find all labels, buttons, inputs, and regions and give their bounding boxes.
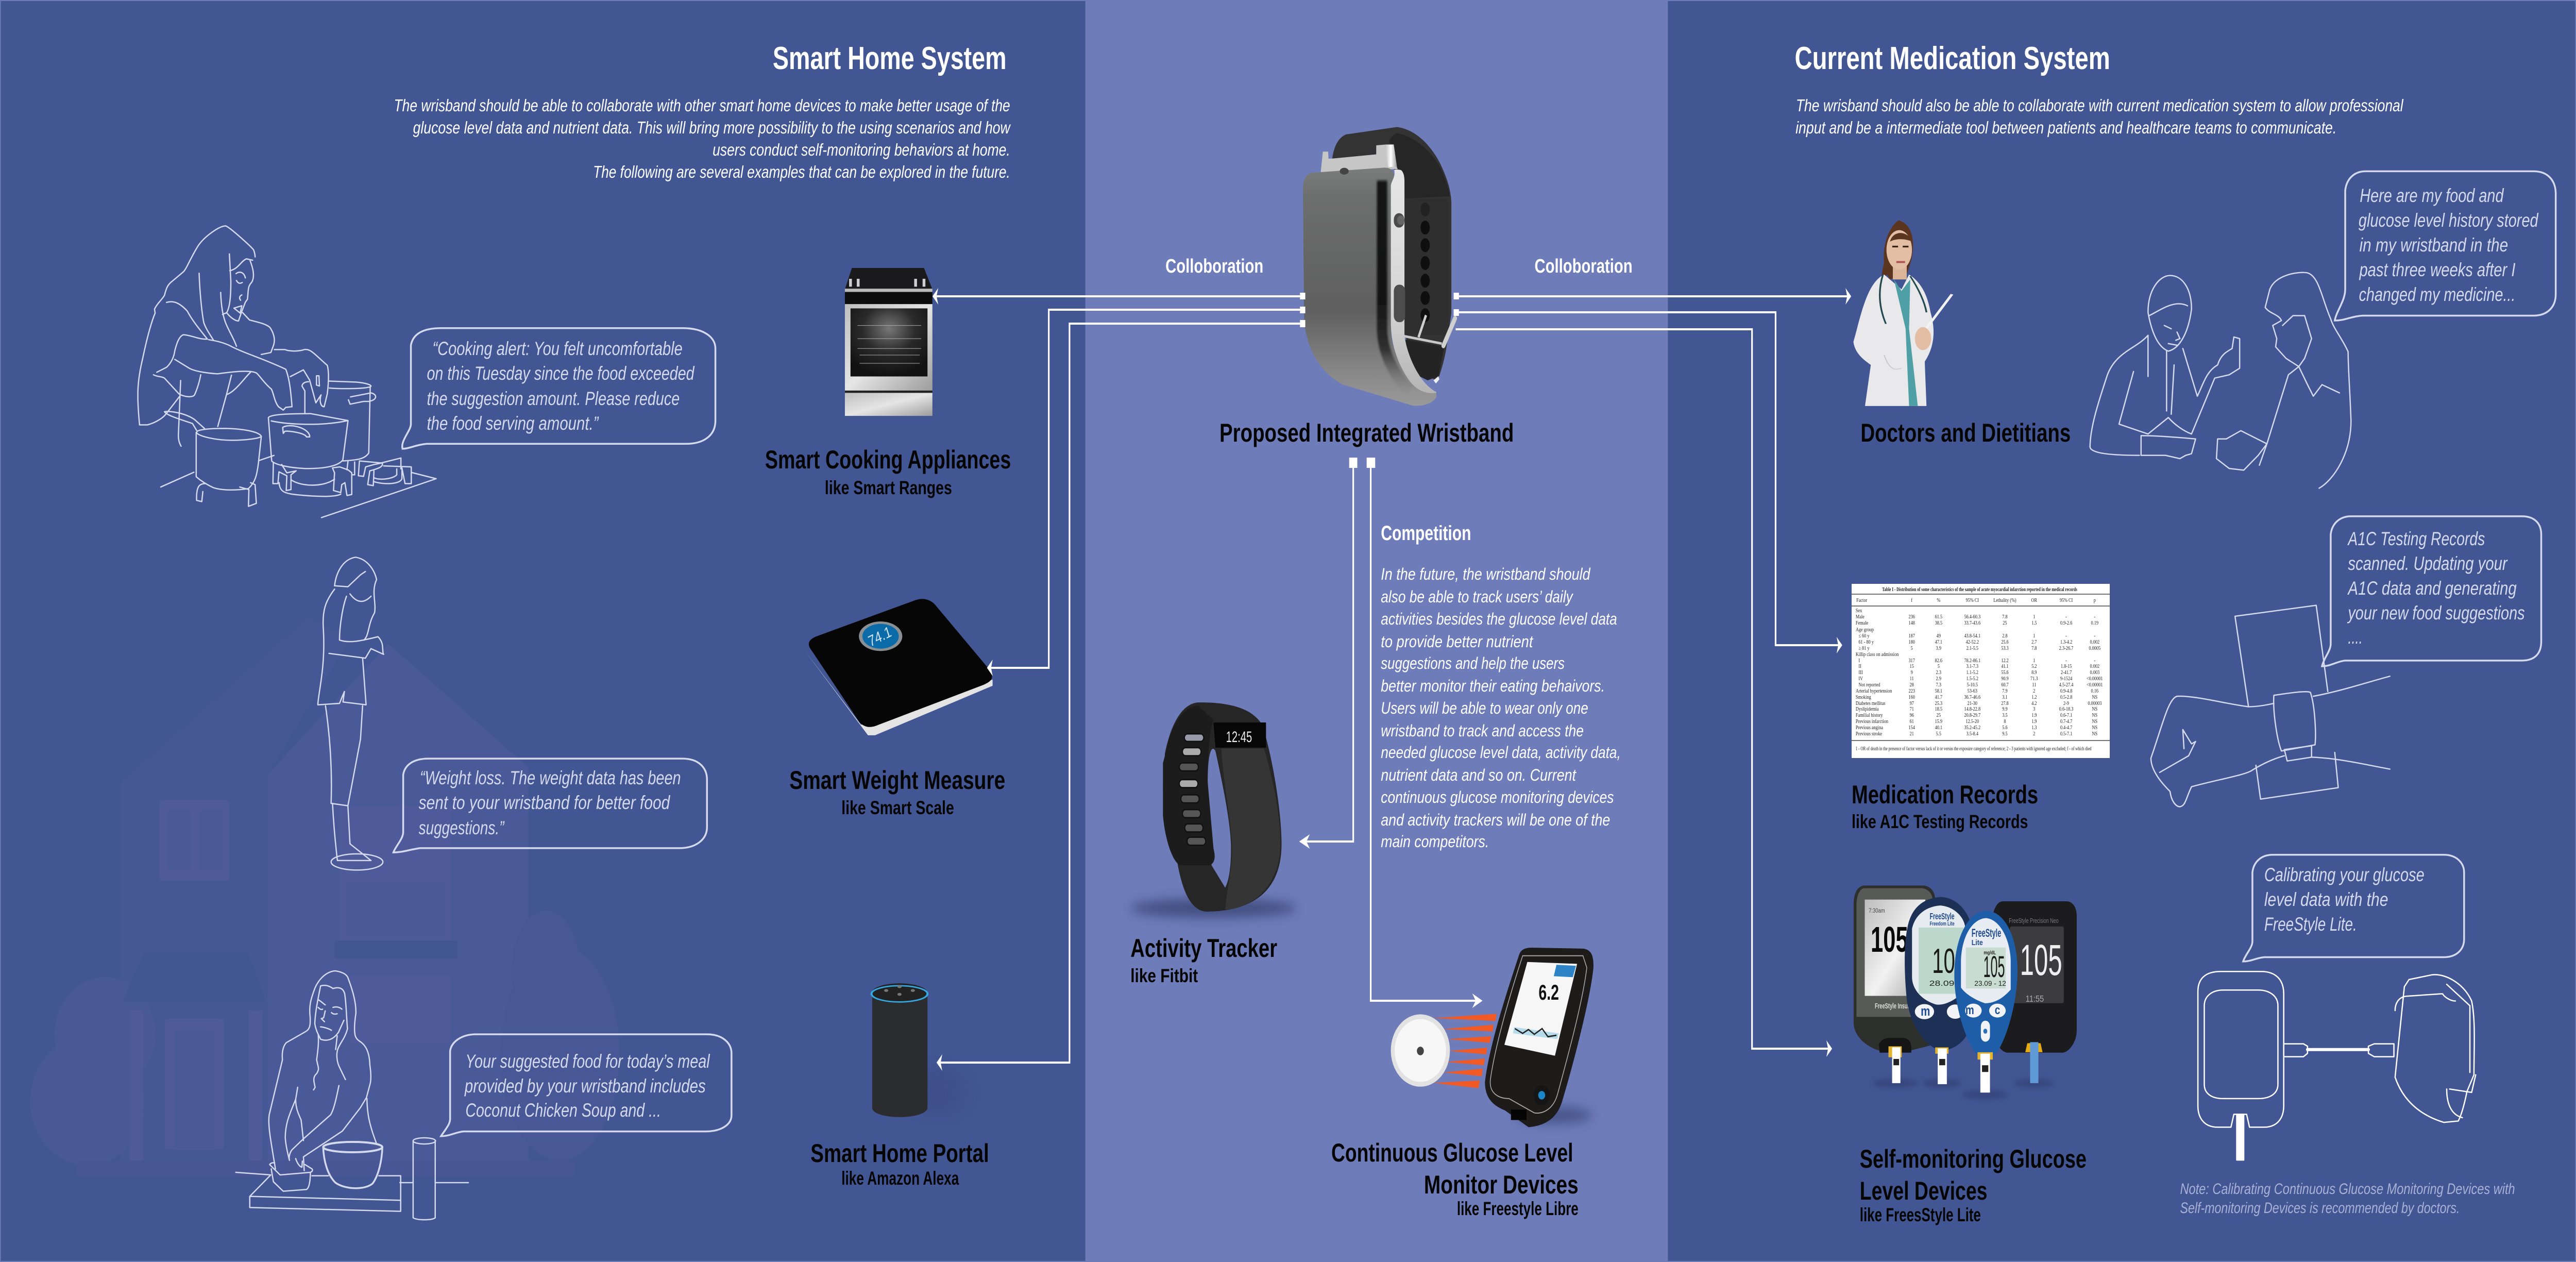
label: smart cooking appliances: [765, 445, 1011, 499]
table: a1c testing records: 2: [2033, 731, 2036, 737]
table: a1c testing records: 3.1: [2002, 695, 2008, 700]
table: a1c testing records: -: [2094, 614, 2095, 620]
table: a1c testing records: NS: [2092, 695, 2097, 700]
table: a1c testing records: -: [2094, 658, 2095, 664]
table: a1c testing records: 1: [2033, 658, 2036, 664]
table: a1c testing records: 71: [1910, 706, 1914, 712]
table: a1c testing records: 3.5: [2002, 713, 2008, 718]
meter: precision neo: [1992, 901, 2077, 1083]
table: a1c testing records: 2.7: [2031, 640, 2037, 645]
table: a1c testing records: 61 - 80 y: [1858, 640, 1874, 645]
text block: competition: continuous glucose monitoring devices: [1381, 788, 1614, 807]
label: medication records: [1852, 780, 2038, 833]
meter: precision neo: 11:55: [2026, 994, 2044, 1004]
arrow: wristband to smart scale: [987, 307, 1306, 676]
table: a1c testing records: 18.5: [1935, 706, 1942, 712]
table: a1c testing records: 15.9: [1935, 719, 1942, 725]
table: a1c testing records: 5.2: [2031, 664, 2037, 669]
speech bubble: food history: [2335, 171, 2556, 321]
table: a1c testing records: 78.2-86.1: [1964, 658, 1980, 664]
table: a1c testing records: 0.7-4.7: [2060, 719, 2073, 725]
table: a1c testing records: 9: [1911, 670, 1913, 676]
text block: competition: and activity trackers will be one of the: [1381, 811, 1610, 830]
speech bubble: a1c records: A1C Testing Records: [2347, 529, 2485, 550]
meter: freestyle lite: FreeStyle: [1972, 927, 2001, 940]
table: a1c testing records: 41.1: [2001, 664, 2009, 669]
arrow: wristband to activity tracker: [1299, 458, 1358, 849]
table: a1c testing records: 317: [1909, 658, 1915, 664]
table: a1c testing records: 0.4-4.7: [2060, 725, 2073, 731]
speech bubble: food history: glucose level history stored: [2359, 210, 2539, 231]
icon: smart range: [845, 268, 933, 416]
table: a1c testing records: 40.1: [1935, 725, 1942, 731]
speech bubble: calibrating: [2243, 855, 2464, 962]
table: a1c testing records: 58.1: [1935, 688, 1942, 694]
table: a1c testing records: 7.3: [1936, 682, 1941, 688]
speech bubble: weight loss: suggestions.”: [419, 818, 505, 839]
table: a1c testing records: II: [1858, 664, 1861, 669]
meter: freedom lite: FreeStyle: [1929, 911, 1955, 921]
label: smart home portal: like Amazon Alexa: [841, 1168, 959, 1189]
intro text: medication: The wrisband should also be able to collaborate with current medication system to allow professional: [1796, 96, 2404, 115]
connectors and arrows: [933, 288, 1851, 1071]
table: a1c testing records: Killip class on admission: [1856, 652, 1899, 658]
label: activity tracker: Activity Tracker: [1130, 933, 1277, 963]
table: a1c testing records: 1.1-5.2: [1967, 670, 1978, 676]
intro text: smart home: users conduct self-monitoring behaviors at home.: [713, 141, 1010, 160]
text block: competition: better monitor their eating behaivors.: [1381, 677, 1605, 696]
speech bubble: food history: past three weeks after I: [2359, 260, 2515, 281]
arrow: wristband to smart home portal: [937, 320, 1306, 1071]
table: a1c testing records: Table I - Distribution of some characteristics of the sample of acute myocardial infarction reported in the medical records: [1882, 587, 2077, 593]
table: a1c testing records: 1.3-4.2: [2060, 640, 2073, 645]
table: a1c testing records: 95% CI: [2060, 598, 2073, 603]
table: a1c testing records: 4.5-27.4: [2059, 682, 2074, 688]
illustration: calibration devices: [2198, 971, 2476, 1160]
speech bubble: cooking alert: the food serving amount.”: [427, 413, 599, 434]
table: a1c testing records: 53.3: [2001, 646, 2009, 651]
table: a1c testing records: 1: [2033, 614, 2036, 620]
tracker display time: 12:45: [1226, 728, 1252, 746]
panel: wristband center: [1086, 0, 1668, 1262]
text block: competition: [1381, 565, 1621, 851]
table: a1c testing records: -: [2094, 633, 2095, 639]
speech bubble: suggested food: Coconut Chicken Soup and ...: [465, 1100, 661, 1121]
label: medication records: Medication Records: [1852, 780, 2038, 809]
speech bubble: a1c records: ....: [2348, 627, 2363, 648]
table: a1c testing records: Diabetes mellitus: [1856, 701, 1886, 706]
table: a1c testing records: III: [1858, 670, 1863, 676]
illustration: wrist scanning record: [2151, 605, 2390, 806]
speech bubble: a1c records: A1C data and generating: [2347, 578, 2517, 599]
arrow: wristband to glucose devices: [1455, 329, 1832, 1057]
meter: precision neo: FreeStyle Precision Neo: [2009, 917, 2059, 924]
speech bubble: calibrating: FreeStyle Lite.: [2264, 914, 2357, 935]
label: smart weight measure: [789, 765, 1005, 819]
meter: freestyle lite: Lite: [1972, 938, 1983, 947]
title: current medication system: Current Medication System: [1795, 40, 2110, 76]
table: a1c testing records: 47.1: [1935, 640, 1942, 645]
table: a1c testing records: NS: [2092, 719, 2097, 725]
table: a1c testing records: [1852, 584, 2110, 758]
table: a1c testing records: <0.00001: [2087, 682, 2103, 688]
text block: competition: suggestions and help the users: [1381, 654, 1565, 673]
speech bubble: food history: Here are my food and: [2360, 186, 2504, 207]
table: a1c testing records: 11: [2032, 682, 2036, 688]
speech bubble: a1c records: scanned. Updating your: [2348, 553, 2508, 575]
table: a1c testing records: Sex: [1856, 608, 1862, 614]
table: a1c testing records: -: [2065, 614, 2067, 620]
icon: glucose meters: [1854, 885, 2077, 1099]
table: a1c testing records: 3.5-8.4: [1967, 731, 1978, 737]
icon: smart scale: [805, 599, 993, 735]
title: smart home system: Smart Home System: [773, 40, 1007, 76]
table: a1c testing records: 9.9: [2002, 706, 2008, 712]
table: a1c testing records: Smoking: [1856, 695, 1871, 700]
table: a1c testing records: 15: [1910, 664, 1914, 669]
speech bubble: food history: in my wristband in the: [2359, 235, 2508, 256]
meter: freedom lite: 28.09-: [1929, 979, 1958, 987]
table: a1c testing records: Previous angina: [1856, 725, 1884, 731]
table: a1c testing records: Arterial hypertension: [1856, 688, 1892, 694]
table: a1c testing records: 0.5-7.1: [2060, 731, 2073, 737]
table: a1c testing records: 1: [2033, 633, 2036, 639]
table: a1c testing records: 3: [2033, 706, 2036, 712]
table: a1c testing records: 2: [2033, 688, 2036, 694]
meter: insulinx: 7:30am: [1869, 907, 1885, 914]
label: collaboration left: Colloboration: [1165, 256, 1263, 277]
product: proposed wristband: [1303, 127, 1455, 406]
intro text: smart home: The following are several examples that can be explored in the future.: [593, 163, 1010, 182]
table: a1c testing records: 33.7-43.6: [1964, 620, 1980, 626]
product: continuous glucose monitor: [1391, 948, 1594, 1127]
table: a1c testing records: 5.5: [1936, 731, 1941, 737]
table: a1c testing records: 9.5: [2002, 731, 2008, 737]
table: a1c testing records: 5: [1938, 664, 1940, 669]
speech bubble: cooking alert: on this Tuesday since the food exceeded: [427, 363, 695, 384]
table: a1c testing records: 38.5: [1935, 620, 1942, 626]
table: a1c testing records: Familial history: [1856, 713, 1883, 718]
table: a1c testing records: NS: [2092, 713, 2097, 718]
table: a1c testing records: <0.00001: [2087, 676, 2103, 682]
house silhouette background: [30, 618, 619, 1177]
table: a1c testing records: %: [1937, 598, 1940, 603]
table: a1c testing records: 96: [1910, 713, 1914, 718]
table: a1c testing records: 11: [1910, 676, 1914, 682]
intro text: smart home: glucose level data and nutrient data. This will bring more possibility to the using scenarios and how: [413, 119, 1011, 138]
meter: freedom lite: m: [1921, 1004, 1930, 1019]
meter: insulinx: 105: [1871, 920, 1908, 960]
table: a1c testing records: 0.9-4.8: [2060, 688, 2073, 694]
meter: freedom lite: Freedom Lite: [1929, 921, 1955, 927]
table: a1c testing records: 12.5-20: [1966, 719, 1979, 725]
orange signal wedges: [1433, 1014, 1497, 1088]
panel: smart home system: [1, 1, 1086, 1261]
table: a1c testing records: 0.002: [2090, 664, 2099, 669]
table: a1c testing records: 49: [1937, 633, 1941, 639]
table: a1c testing records: 160: [1909, 695, 1915, 700]
table: a1c testing records: 21: [1910, 731, 1914, 737]
icon: smart home portal: [872, 983, 962, 1117]
table: a1c testing records: 0.6-7.1: [2060, 713, 2073, 718]
text block: competition: to provide better nutrient: [1381, 633, 1533, 651]
table: a1c testing records: 2.3-26.7: [2059, 646, 2074, 651]
meter: freestyle lite: mg/dL: [1984, 950, 1996, 955]
table: a1c testing records: 53-63: [1968, 688, 1977, 694]
text block: competition: Users will be able to wear only one: [1381, 699, 1588, 718]
table: a1c testing records: 1.9: [2031, 713, 2037, 718]
table: a1c testing records: 2.9: [1936, 676, 1941, 682]
table: a1c testing records: 0.00003: [2088, 701, 2102, 706]
table: a1c testing records: Female: [1856, 620, 1868, 626]
meter: insulinx: [1854, 885, 1935, 1083]
speech bubble: calibrating: Calibrating your glucose: [2264, 865, 2425, 886]
scale reading: 74.1: [866, 623, 893, 650]
label: self-monitoring glucose level devices: Self-monitoring Glucose: [1860, 1144, 2087, 1173]
table: a1c testing records: 236: [1909, 614, 1915, 620]
panel: current medication system: [1668, 1, 2575, 1261]
table: a1c testing records: 27.8: [2001, 701, 2009, 706]
label: smart weight measure: Smart Weight Measure: [789, 765, 1005, 795]
illustration: woman cooking: [138, 226, 436, 517]
table: a1c testing records: 1 - OR of death in the presence of factor versus lack of it or versus the exposure category of reference; 2 - 3 patients with ignored age excluded; f - of which died: [1856, 746, 2092, 752]
table: a1c testing records: 180: [1909, 640, 1915, 645]
meter: insulinx: FreeStyle Insul: [1875, 1002, 1909, 1010]
intro text: medication: input and be a intermediate tool between patients and healthcare teams to communicate.: [1795, 119, 2336, 138]
illustration: woman on scale: [318, 557, 384, 870]
table: a1c testing records: 14.8-22.8: [1964, 706, 1980, 712]
meter: freestyle lite: 23.09 - 12: [1974, 980, 2006, 987]
table: a1c testing records: 25.3: [1935, 701, 1942, 706]
meter: freestyle lite: [1954, 911, 2018, 1092]
note: calibration: Self-monitoring Devices is recommended by doctors.: [2180, 1199, 2460, 1217]
table: a1c testing records: 0.6-18.3: [2059, 706, 2074, 712]
table: a1c testing records: 2-41.7: [2061, 670, 2072, 676]
table: a1c testing records: Previous stroke: [1856, 731, 1882, 737]
table: a1c testing records: f: [1911, 597, 1913, 603]
table: a1c testing records: OR: [2031, 598, 2038, 603]
table: a1c testing records: 2.3: [1936, 670, 1941, 676]
table: a1c testing records: 61.5: [1935, 614, 1942, 620]
table: a1c testing records: 8.9: [2031, 670, 2037, 676]
speech bubble: calibrating: level data with the: [2264, 889, 2388, 911]
table: a1c testing records: 25: [1937, 713, 1941, 718]
table: a1c testing records: 7.8: [2002, 614, 2008, 620]
label: collaboration right: Colloboration: [1535, 256, 1633, 277]
speech bubble: suggested food: [441, 1034, 732, 1136]
speech bubble: suggested food: provided by your wristband includes: [464, 1076, 706, 1097]
meter: freestyle lite: m: [1965, 1003, 1974, 1017]
label: doctors and dietitians: Doctors and Dietitians: [1860, 418, 2071, 447]
table: a1c testing records: Not reported: [1858, 682, 1880, 688]
table: a1c testing records: 0.19: [2091, 620, 2098, 626]
table: a1c testing records: 71.3: [2030, 676, 2038, 682]
table: a1c testing records: Male: [1856, 614, 1865, 620]
table: a1c testing records: 223: [1909, 688, 1915, 694]
text block: competition: activities besides the glucose level data: [1381, 610, 1617, 629]
table: a1c testing records: 5.6: [2002, 725, 2008, 731]
table: a1c testing records: ≥ 81 y: [1858, 646, 1870, 651]
table: a1c testing records: 0.0005: [2089, 646, 2100, 651]
table: a1c testing records: 7.9: [2002, 688, 2008, 694]
table: a1c testing records: 95% CI: [1966, 598, 1979, 603]
table: a1c testing records: 90.9: [2001, 676, 2009, 682]
label: smart weight measure: like Smart Scale: [841, 798, 954, 819]
table: a1c testing records: NS: [2092, 731, 2097, 737]
label: continuous glucose monitor: Monitor Devices: [1424, 1170, 1579, 1199]
intro text: smart home: [394, 96, 1011, 182]
label: activity tracker: like Fitbit: [1130, 966, 1198, 987]
label: smart home portal: [810, 1138, 989, 1189]
table: a1c testing records: ≤ 60 y: [1858, 633, 1870, 639]
speech bubble: cooking alert: “Cooking alert: You felt uncomfortable: [433, 339, 683, 360]
meter: precision neo: 105: [2020, 937, 2062, 985]
speech bubble: weight loss: sent to your wristband for better food: [419, 793, 671, 814]
table: a1c testing records: 25: [2003, 620, 2007, 626]
label: self-monitoring glucose level devices: Level Devices: [1860, 1176, 1988, 1205]
speech bubble: a1c records: your new food suggestions: [2347, 603, 2525, 624]
text block: competition: nutrient data and so on. Current: [1381, 766, 1577, 785]
table: a1c testing records: 56.4-60.3: [1964, 614, 1980, 620]
speech bubble: food history: changed my medicine...: [2359, 284, 2515, 306]
table: a1c testing records: 97: [1910, 701, 1914, 706]
table: a1c testing records: 0.16: [2091, 688, 2098, 694]
intro text: medication: [1795, 96, 2404, 138]
label: smart home portal: Smart Home Portal: [810, 1138, 989, 1168]
intro text: smart home: The wrisband should be able to collaborate with other smart home devices to make better usage of the: [394, 96, 1010, 115]
meter: freedom lite: 109: [1932, 941, 1967, 980]
text block: competition: wristband to track and access the: [1381, 722, 1584, 741]
text block: competition: also be able to track users’ daily: [1381, 588, 1573, 607]
table: a1c testing records: NS: [2092, 725, 2097, 731]
table: a1c testing records: 5: [1911, 646, 1913, 651]
speech bubble: suggested food: Your suggested food for today’s meal: [465, 1051, 710, 1072]
table: a1c testing records: Age group: [1856, 627, 1874, 633]
table: a1c testing records: -: [2065, 658, 2067, 664]
table: a1c testing records: 12.2: [2001, 658, 2009, 664]
table: a1c testing records: 7.8: [2031, 646, 2037, 651]
table: a1c testing records: 2.8: [2002, 633, 2008, 639]
table: a1c testing records: Lethality (%): [1993, 597, 2016, 603]
table: a1c testing records: 8: [2004, 719, 2006, 725]
table: a1c testing records: 25.6: [2001, 640, 2009, 645]
monitor reading: 6.2: [1538, 981, 1559, 1005]
label: continuous glucose monitor: Continuous Glucose Level: [1331, 1138, 1573, 1167]
arrow: wristband to smart range: [933, 288, 1306, 305]
icon: doctor: [1853, 220, 1952, 406]
table: a1c testing records: 82.6: [1935, 658, 1942, 664]
table: a1c testing records: 2.1-5.5: [1967, 646, 1978, 651]
table: a1c testing records: 1.3: [2031, 725, 2037, 731]
text block: competition: needed glucose level data, activity data,: [1381, 744, 1621, 762]
table: a1c testing records: 0.002: [2090, 640, 2099, 645]
label: medication records: like A1C Testing Records: [1852, 812, 2028, 833]
speech bubble: a1c records: [2322, 516, 2541, 666]
table: a1c testing records: 9-1524: [2060, 676, 2073, 682]
table: a1c testing records: 2-9: [2063, 701, 2069, 706]
table: a1c testing records: 0.003: [2090, 670, 2099, 676]
table: a1c testing records: 3.9: [1936, 646, 1941, 651]
table: a1c testing records: 55.6: [2001, 670, 2009, 676]
table: a1c testing records: 28: [1910, 682, 1914, 688]
illustration: woman preparing food: [236, 971, 468, 1220]
arrow: wristband to doctors: [1454, 288, 1851, 305]
arrow: wristband to medication records: [1454, 309, 1842, 653]
table: a1c testing records: 154: [1909, 725, 1915, 731]
table: a1c testing records: NS: [2092, 706, 2097, 712]
label: activity tracker: [1130, 933, 1277, 987]
note: calibration: Note: Calibrating Continuous Glucose Monitoring Devices with: [2180, 1180, 2515, 1198]
meter: freestyle lite: 105: [1984, 951, 2005, 984]
table: a1c testing records: 187: [1909, 633, 1915, 639]
speech bubble: weight loss: [394, 759, 707, 852]
table: a1c testing records: 3.1-7.3: [1967, 664, 1978, 669]
table: a1c testing records: 36.7-46.6: [1964, 695, 1980, 700]
label: continuous glucose monitor: like Freestyle Libre: [1457, 1199, 1579, 1220]
table: a1c testing records: 21-30: [1968, 701, 1977, 706]
meter: freestyle lite: c: [1995, 1003, 2000, 1017]
arrow: wristband to glucose monitor: [1367, 458, 1483, 1008]
table: a1c testing records: 41.7: [1935, 695, 1942, 700]
table: a1c testing records: 1.8-15: [2061, 664, 2072, 669]
table: a1c testing records: 0.9-2.6: [2060, 620, 2073, 626]
table: a1c testing records: 4.2: [2031, 701, 2037, 706]
illustration: patient with doctor: [2090, 273, 2351, 488]
table: a1c testing records: 1.5-5.2: [1967, 676, 1978, 682]
product: activity tracker: [1130, 702, 1297, 918]
table: a1c testing records: IV: [1858, 676, 1863, 682]
table: a1c testing records: -: [2065, 633, 2067, 639]
table: a1c testing records: 5-10.5: [1967, 682, 1978, 688]
table: a1c testing records: 60.7: [2001, 682, 2009, 688]
table: a1c testing records: 42-52.2: [1966, 640, 1979, 645]
text block: competition: main competitors.: [1381, 833, 1489, 851]
table: a1c testing records: 61: [1910, 719, 1914, 725]
speech bubble: cooking alert: [402, 328, 716, 449]
label: self-monitoring glucose level devices: [1860, 1144, 2087, 1226]
label: smart cooking appliances: Smart Cooking Appliances: [765, 445, 1011, 474]
table: a1c testing records: 1.9: [2031, 719, 2037, 725]
meter shadows: [1872, 1079, 2054, 1099]
label: proposed integrated wristband: Proposed Integrated Wristband: [1219, 418, 1514, 447]
label: continuous glucose monitor: [1331, 1138, 1579, 1220]
table: a1c testing records: 148: [1909, 620, 1915, 626]
table: a1c testing records: 20.8-29.7: [1964, 713, 1980, 718]
table: a1c testing records: Previous infarction: [1856, 718, 1888, 725]
label: self-monitoring glucose level devices: like FreesStyle Lite: [1860, 1205, 1981, 1226]
note: calibration: [2180, 1180, 2515, 1217]
meter: freedom lite: [1905, 897, 1972, 1084]
speech bubble: weight loss: “Weight loss. The weight data has been: [420, 768, 681, 789]
table: a1c testing records: I: [1858, 658, 1860, 664]
table: a1c testing records: 43.8-54.1: [1964, 633, 1980, 639]
table: a1c testing records: p: [2094, 598, 2096, 603]
table: a1c testing records: 35.2-45.2: [1964, 725, 1980, 731]
label: smart cooking appliances: like Smart Ranges: [825, 478, 952, 499]
heading: competition: Competition: [1381, 521, 1471, 545]
table: a1c testing records: Factor: [1856, 598, 1868, 603]
table: a1c testing records: 0.5-2.8: [2060, 695, 2073, 700]
table: a1c testing records: 1.5: [2031, 620, 2037, 626]
speech bubble: cooking alert: the suggestion amount. Please reduce: [427, 389, 680, 410]
table: a1c testing records: 1.2: [2031, 695, 2037, 700]
table: a1c testing records: Dyslipidemia: [1856, 706, 1879, 712]
text block: competition: In the future, the wristband should: [1381, 565, 1591, 584]
